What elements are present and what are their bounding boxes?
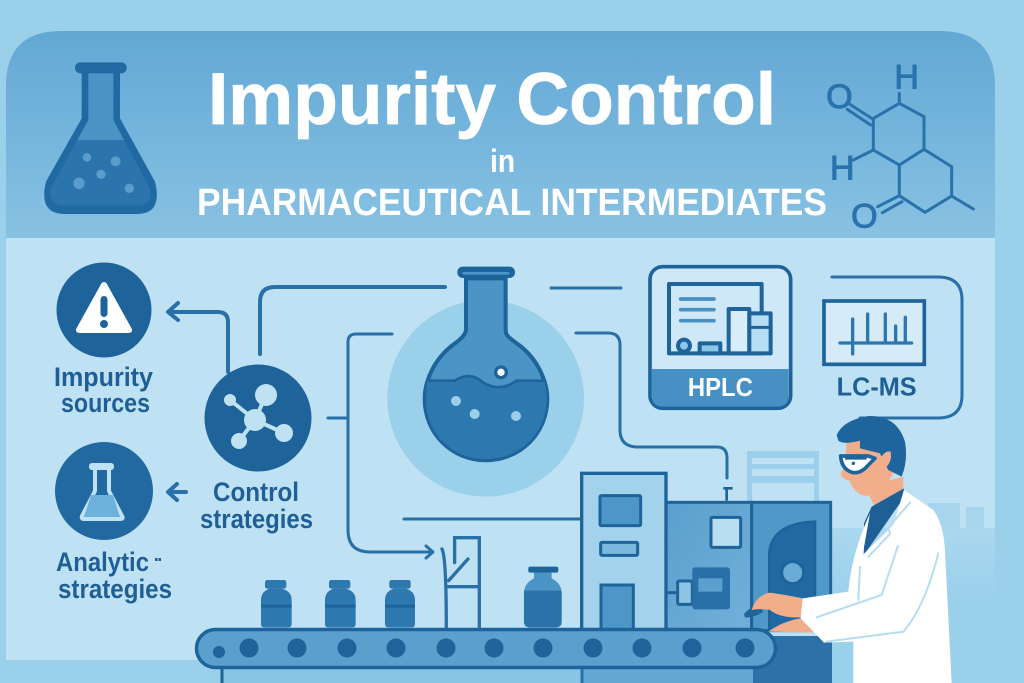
hair (837, 416, 906, 477)
title: Impurity Control (208, 59, 776, 140)
icon: molecular structure (826, 59, 973, 235)
machine: base under conveyor (222, 636, 832, 683)
panel: HPLC instrument card: HPLC (688, 372, 753, 402)
icon: molecular structure: O (826, 78, 853, 116)
icon: impurity sources warning circle (56, 262, 152, 358)
connector: LC-MS to scientist (832, 277, 962, 418)
icon: molecular structure: H (894, 59, 919, 97)
connector: flask to HPLC (551, 286, 621, 290)
panel: header banner (6, 31, 995, 238)
label: control strategies: strategies (200, 504, 313, 534)
bottle 3 (385, 580, 415, 627)
connector: flask to machine (576, 333, 727, 478)
conveyor belt (196, 630, 776, 668)
label: impurity sources (54, 362, 153, 418)
subtitle: PHARMACEUTICAL INTERMEDIATES (197, 182, 827, 224)
lab coat (801, 490, 952, 683)
panel: HPLC instrument card (650, 267, 791, 408)
connector: control strategies to flask (260, 287, 445, 354)
subtitle word: in: in (490, 143, 515, 179)
connector arrow: to impurity sources (168, 303, 228, 372)
panel: lower content area (6, 238, 995, 660)
icon: conical flask (44, 62, 157, 214)
label: impurity sources: sources (61, 388, 150, 418)
panel: lower right fade (832, 528, 995, 598)
machine: production equipment (582, 473, 831, 631)
label: analytic strategies (56, 547, 172, 604)
icon: molecular structure: H (830, 149, 855, 187)
goggles (841, 456, 875, 473)
background skyline (928, 503, 984, 529)
label: control strategies: Control (213, 477, 299, 507)
icon: round bottom flask (387, 267, 584, 497)
neck and face (841, 437, 903, 510)
icon: molecular structure: O (851, 197, 878, 235)
scientist (744, 416, 952, 683)
label: analytic strategies: Analytic (56, 547, 149, 577)
bottle 2 (325, 580, 356, 627)
label: analytic strategies: strategies (58, 574, 172, 604)
large bottle (524, 567, 562, 627)
label: control strategies (200, 477, 313, 534)
panel: LC-MS monitor: LC-MS (837, 372, 917, 402)
filling station frame (442, 538, 479, 627)
bottles on conveyor (261, 538, 562, 627)
ear (879, 451, 891, 468)
label: impurity sources: Impurity (54, 362, 153, 392)
icon: control strategies molecule circle (204, 364, 312, 472)
connector arrow: to analytic strategies (168, 484, 186, 500)
panel: LC-MS monitor (824, 301, 924, 402)
connector arrow: flask to filling station (328, 334, 433, 558)
icon: analytic strategies flask circle (55, 442, 153, 540)
background building (747, 451, 819, 503)
bottle 1 (261, 580, 292, 627)
tie and shirt (864, 488, 904, 555)
hands (744, 593, 820, 633)
connector: filling station to machine (404, 518, 582, 520)
